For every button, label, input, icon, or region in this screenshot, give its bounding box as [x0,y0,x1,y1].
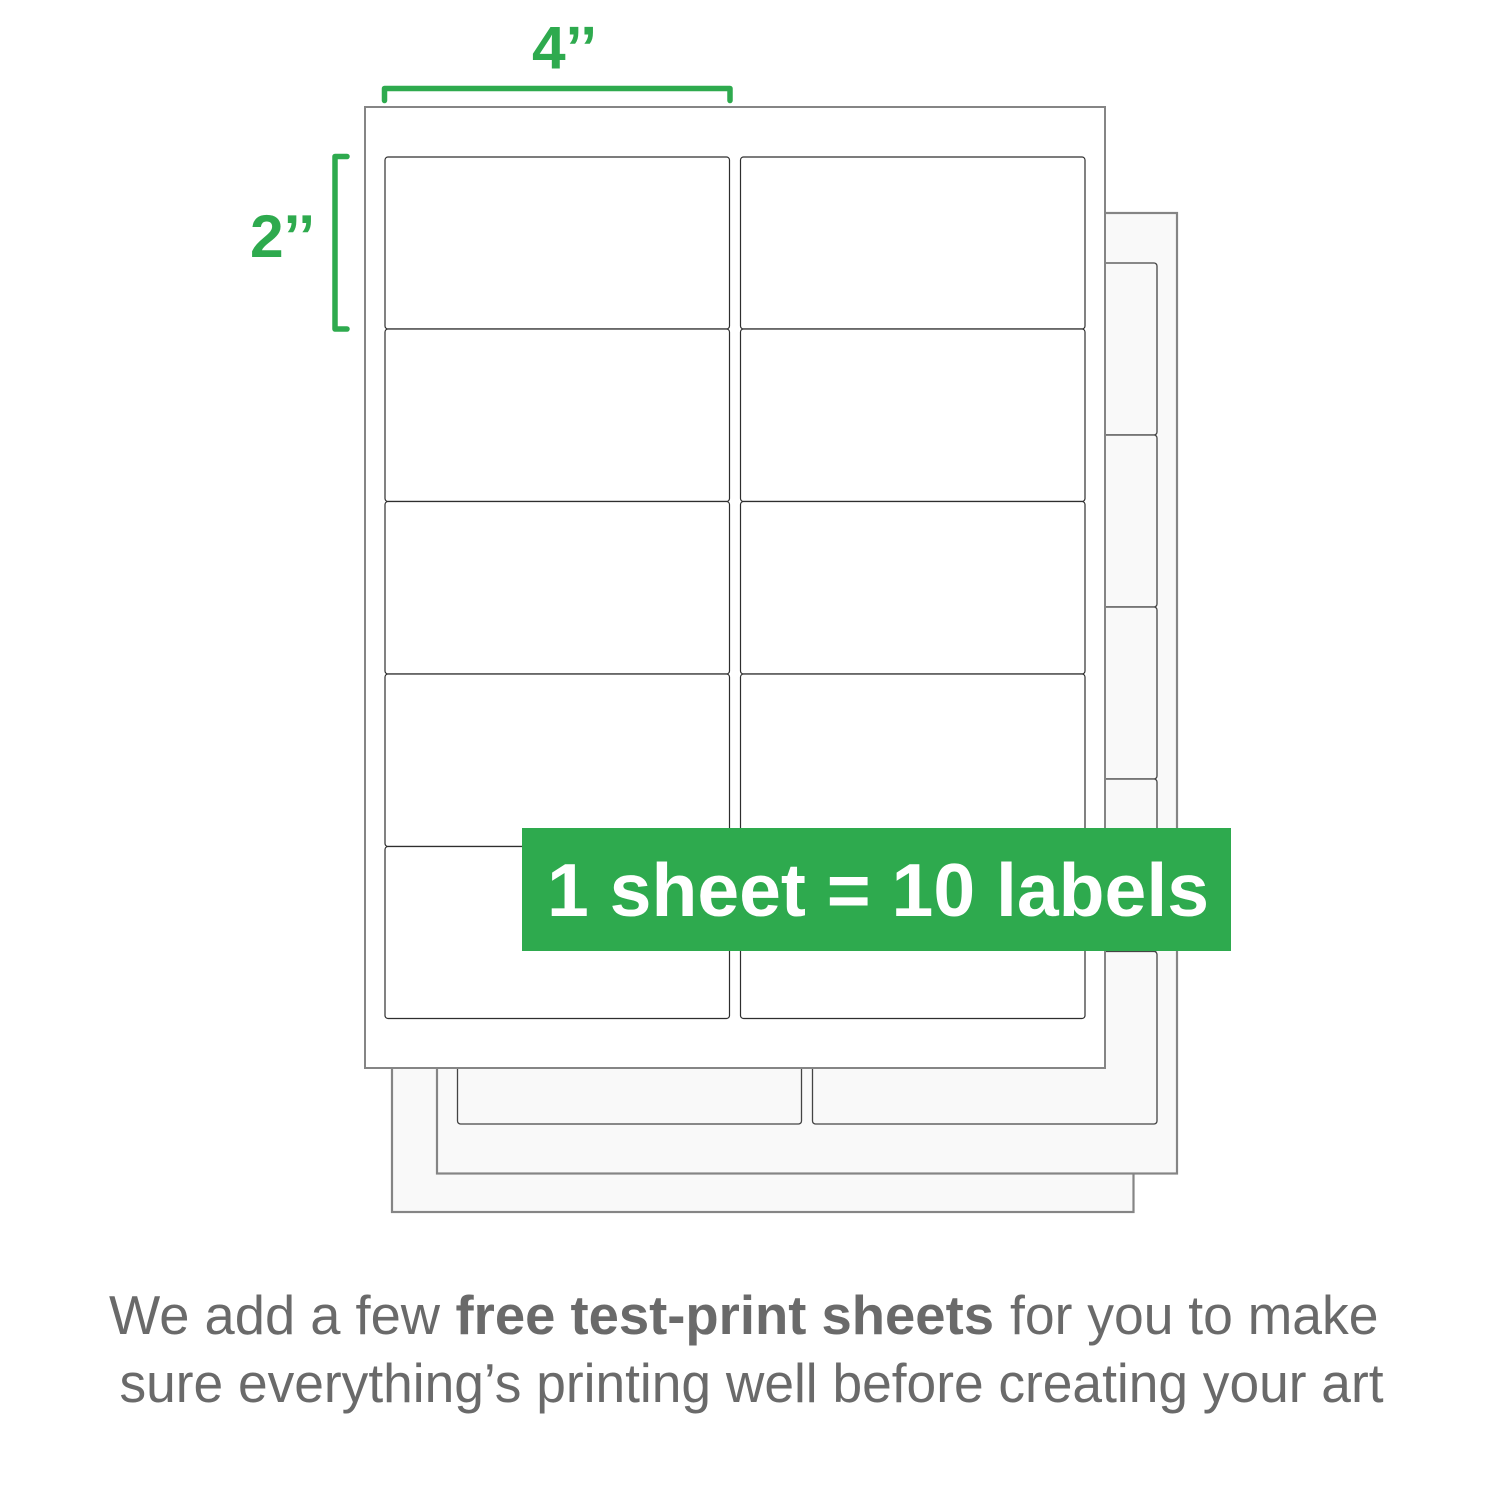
callout banner [522,828,1231,951]
caption text: for you to make [1010,1284,1378,1346]
height bracket [335,156,347,329]
front sheet with 10 labels [365,107,1105,1068]
width bracket [384,88,730,100]
caption text [109,1284,1384,1414]
callout banner: 1 sheet = 10 labels [547,848,1209,932]
caption text: sure everything’s printing well before creating your art [120,1352,1384,1414]
caption text: We add a few [109,1284,440,1346]
width dimension: 4 inches: 4’’ [532,14,597,82]
back sheet [392,300,1134,1212]
middle sheet with labels [437,213,1177,1174]
caption text: free test-print sheets [456,1284,994,1346]
height dimension: 2 inches: 2’’ [250,203,315,270]
